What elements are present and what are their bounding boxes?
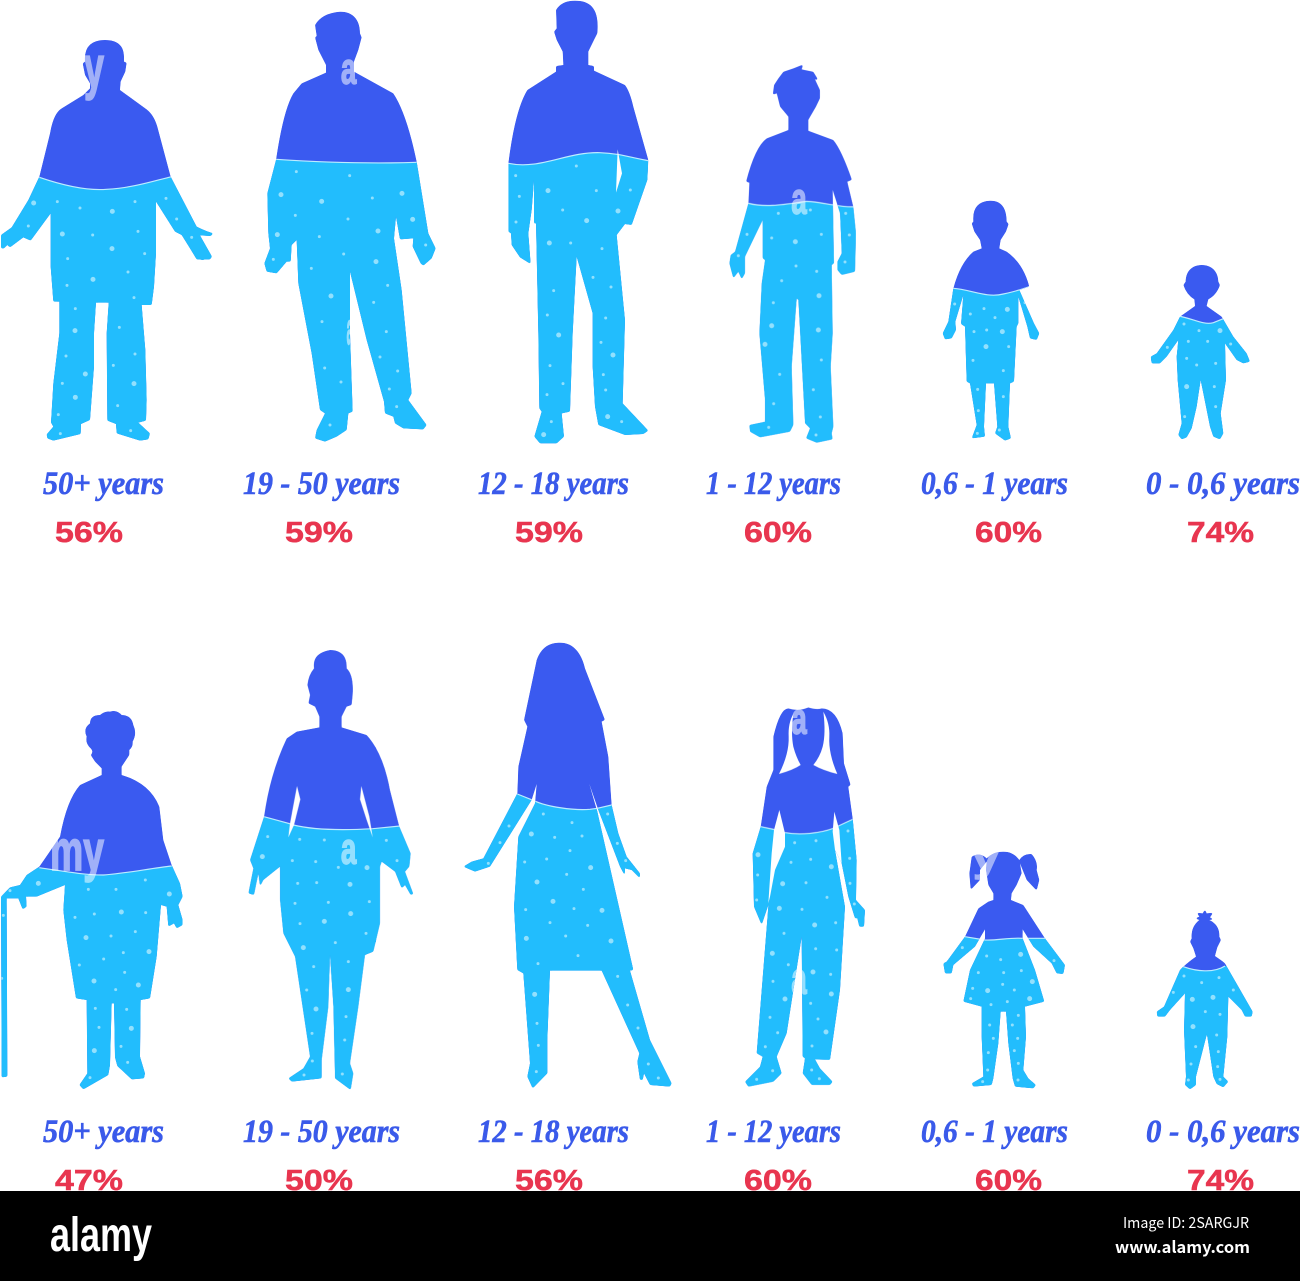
bottom row percentages: 74% bbox=[1187, 1165, 1254, 1197]
figure: toddler girl 60% bbox=[940, 839, 1067, 1089]
bottom row age labels: 0,6 - 1 years bbox=[921, 1114, 1068, 1150]
figure: elderly woman with cane 47%: my bbox=[50, 820, 104, 883]
figure: adult woman 50% bbox=[247, 649, 417, 1091]
figure: teenage boy 59% bbox=[503, 0, 653, 445]
figure: infant boy 74% bbox=[1150, 263, 1252, 440]
figure: adult man 59%: a bbox=[347, 305, 353, 354]
figure: adult man 59% bbox=[263, 10, 440, 443]
figure: elderly woman with cane 47% bbox=[0, 708, 187, 1090]
figure: boy 60% bbox=[727, 63, 858, 443]
top row age labels: 12 - 18 years bbox=[478, 466, 629, 502]
figure: teenage girl 56% bbox=[460, 642, 673, 1088]
top row age labels: 0,6 - 1 years bbox=[921, 466, 1068, 502]
bottom row percentages bbox=[55, 1165, 1254, 1197]
website: www.alamy.com bbox=[1115, 1234, 1250, 1258]
top row percentages: 59% bbox=[515, 517, 583, 549]
bottom row percentages: 60% bbox=[975, 1165, 1042, 1197]
figure: boy 60%: a bbox=[791, 174, 807, 223]
bottom row age labels: 1 - 12 years bbox=[706, 1114, 841, 1150]
figure: girl with pigtails 60% bbox=[745, 708, 865, 1087]
logo text: alamy bbox=[50, 1209, 152, 1262]
footer band bbox=[0, 1191, 1300, 1281]
top row age labels bbox=[43, 466, 1300, 502]
figure: toddler girl 60%: y bbox=[973, 839, 999, 880]
figure: adult woman 50%: a bbox=[341, 824, 357, 873]
top row percentages: 60% bbox=[744, 517, 812, 549]
bottom row percentages: 56% bbox=[515, 1165, 583, 1197]
top row percentages: 56% bbox=[55, 517, 123, 549]
bottom row age labels: 19 - 50 years bbox=[243, 1114, 400, 1150]
figure: elderly man 56%: y bbox=[84, 33, 104, 100]
figure: elderly man 56% bbox=[0, 33, 220, 443]
image id: Image ID: 2SARGJR bbox=[1123, 1212, 1249, 1233]
top row percentages: 60% bbox=[975, 517, 1042, 549]
bottom row age labels: 12 - 18 years bbox=[478, 1114, 629, 1150]
figure: girl with pigtails 60%: a bbox=[791, 954, 807, 1003]
bottom row percentages: 50% bbox=[285, 1165, 353, 1197]
top row percentages: 59% bbox=[285, 517, 353, 549]
top row age labels: 50+ years bbox=[43, 466, 164, 502]
bottom row percentages: 60% bbox=[744, 1165, 812, 1197]
figure: toddler boy 60% bbox=[940, 200, 1040, 442]
bottom row age labels bbox=[43, 1114, 1300, 1150]
bottom row percentages: 47% bbox=[55, 1165, 123, 1197]
top row percentages bbox=[55, 517, 1254, 549]
top row percentages: 74% bbox=[1187, 517, 1254, 549]
bottom row age labels: 50+ years bbox=[43, 1114, 164, 1150]
top row age labels: 19 - 50 years bbox=[243, 466, 400, 502]
figure: adult man 59%: a bbox=[341, 44, 357, 93]
figure: girl with pigtails 60%: a bbox=[791, 694, 807, 743]
figure: infant girl 74% bbox=[1155, 908, 1254, 1090]
top row age labels: 1 - 12 years bbox=[706, 466, 841, 502]
